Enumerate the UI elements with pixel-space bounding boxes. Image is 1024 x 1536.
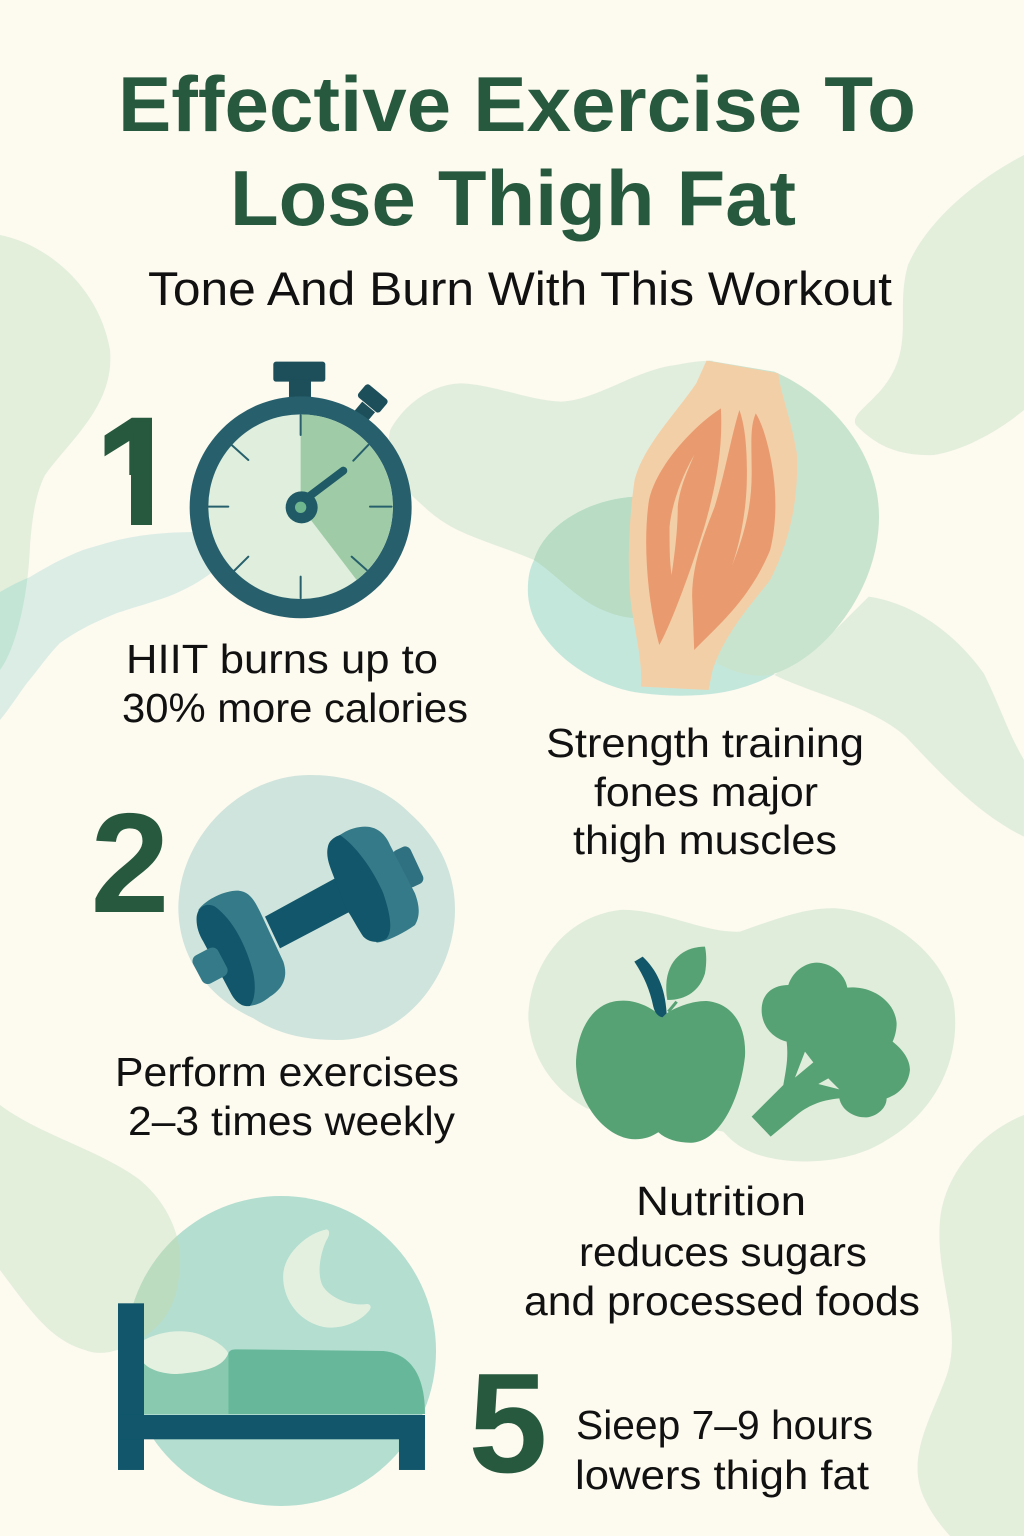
background blob: centre wave: [389, 361, 1024, 837]
text: sleep: lowers thigh fat: [575, 1452, 870, 1498]
background blob: left upper: [0, 235, 110, 670]
number 5: 5: [469, 1344, 547, 1503]
background blob: left overlap: [0, 578, 28, 670]
text: strength: thigh muscles: [573, 817, 837, 863]
text: perform: [115, 1049, 459, 1144]
text: HIIT: [122, 636, 468, 731]
icon: stopwatch: [190, 362, 412, 618]
text: HIIT: 30% more calories: [122, 685, 468, 731]
title: Lose Thigh Fat: [230, 154, 796, 242]
text: strength: fones major: [594, 769, 818, 815]
background blob: teal ribbon left: [0, 532, 215, 720]
number 2: 2: [91, 784, 169, 943]
text: perform: 2–3 times weekly: [128, 1098, 456, 1144]
background blob: lower left: [0, 1105, 180, 1353]
text: HIIT: HIIT burns up to: [126, 636, 438, 682]
text: nutrition: reduces sugars: [579, 1229, 867, 1275]
background blob: lower right: [918, 1115, 1024, 1536]
title: Effective Exercise To: [118, 60, 916, 148]
icon: dumbbell: [178, 775, 455, 1040]
number 1: 1: [96, 387, 180, 555]
text: sleep: Sieep 7–9 hours: [576, 1402, 873, 1448]
icon: bed and moon: [118, 1196, 436, 1506]
text: sleep: [575, 1402, 873, 1498]
title: [118, 60, 916, 242]
text: nutrition: Nutrition: [636, 1178, 806, 1224]
subtitle: Tone And Burn With This Workout: [148, 262, 892, 315]
icon: thigh muscle: [528, 361, 879, 696]
text: strength: Strength training: [546, 720, 864, 766]
text: nutrition: [524, 1178, 920, 1324]
text: perform: Perform exercises: [115, 1049, 459, 1095]
background blob: right upper: [855, 155, 1024, 455]
text: strength: [546, 720, 864, 863]
icon: apple and broccoli: [528, 908, 955, 1161]
text: nutrition: and processed foods: [524, 1278, 920, 1324]
